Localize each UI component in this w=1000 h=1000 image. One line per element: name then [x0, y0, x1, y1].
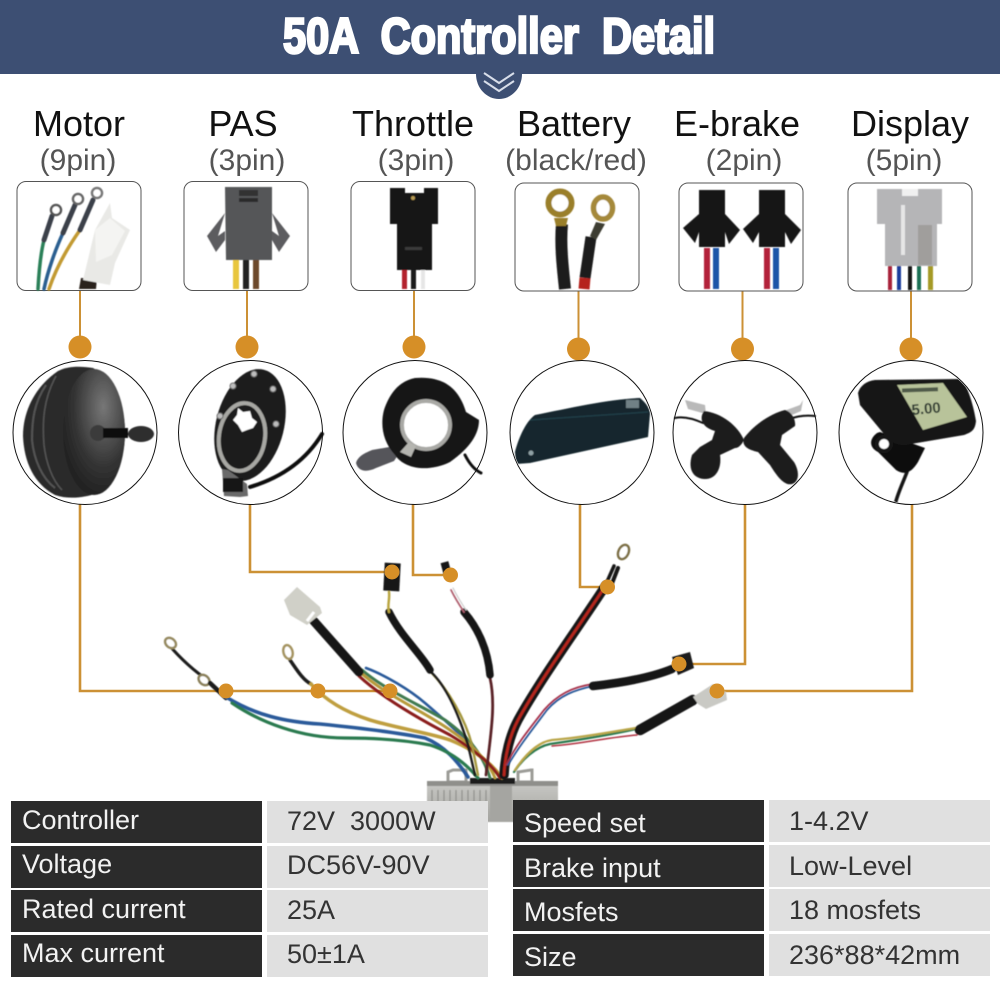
row: controller	[11, 801, 488, 843]
row: voltage: Voltage	[22, 849, 112, 879]
wires: throttle	[441, 561, 493, 775]
header banner	[0, 0, 1000, 99]
row: rated current: Rated current	[22, 894, 186, 924]
heading: PAS: (3pin)	[209, 144, 285, 177]
heading: battery	[505, 103, 647, 177]
connector photo: motor	[17, 182, 141, 290]
heading: e-brake: (2pin)	[706, 144, 782, 177]
heading: throttle: Throttle	[352, 103, 474, 144]
heading: PAS: PAS	[208, 103, 278, 144]
connector photo: PAS	[184, 182, 308, 290]
heading: motor: (9pin)	[40, 144, 116, 177]
row: voltage	[11, 846, 488, 888]
row: max current: 50±1A	[287, 939, 365, 969]
heading: e-brake	[674, 103, 800, 177]
row: brake input: Low-Level	[789, 851, 912, 881]
spec table: right	[513, 800, 990, 976]
title: 50A Controller Detail	[283, 8, 715, 64]
row: max current	[11, 935, 488, 977]
connector headings	[33, 103, 969, 177]
connector photo: throttle	[351, 182, 475, 290]
wires: battery	[504, 543, 631, 775]
row: size: Size	[524, 942, 577, 972]
heading: battery: (black/red)	[505, 144, 647, 177]
heading: battery: Battery	[517, 103, 631, 144]
component circle: e-brake levers	[673, 360, 817, 504]
connector leader lines	[80, 290, 912, 691]
heading: e-brake: E-brake	[674, 103, 800, 144]
controller body	[427, 770, 558, 822]
row: size: 236*88*42mm	[789, 940, 960, 970]
row: mosfets: 18 mosfets	[789, 895, 921, 925]
row: rated current	[11, 890, 488, 932]
row: max current: Max current	[22, 938, 165, 968]
component circle: battery	[510, 360, 654, 504]
component circle: LCD display	[839, 360, 983, 505]
row: rated current: 25A	[287, 895, 335, 925]
heading: display: Display	[851, 103, 969, 144]
wires: PAS	[383, 563, 478, 775]
row: mosfets: Mosfets	[524, 897, 619, 927]
chevron tab	[476, 73, 522, 99]
wires: display	[514, 684, 727, 772]
row: controller: 72V 3000W	[287, 806, 436, 836]
row: size	[513, 934, 990, 976]
component circle: thumb throttle	[343, 360, 487, 504]
wires: hall sensor bundle	[284, 587, 500, 778]
heading: PAS	[208, 103, 285, 177]
controller with wiring harness	[163, 543, 727, 822]
row: speed set: Speed set	[524, 808, 646, 838]
spec table: left	[11, 801, 488, 977]
heading: motor	[33, 103, 125, 177]
row: mosfets	[513, 889, 990, 931]
heading: display: (5pin)	[866, 144, 942, 177]
row: brake input: Brake input	[524, 853, 661, 883]
row: speed set: 1-4.2V	[789, 806, 869, 836]
row: brake input	[513, 845, 990, 887]
heading: throttle	[352, 103, 474, 177]
heading: motor: Motor	[33, 103, 125, 144]
heading: throttle: (3pin)	[378, 144, 454, 177]
connector photo: battery	[515, 183, 639, 291]
connector photo: display	[848, 183, 972, 291]
row: voltage: DC56V-90V	[287, 850, 430, 880]
connector nodes	[68, 336, 922, 360]
component circle: PAS sensor disc	[178, 360, 322, 504]
row: controller: Controller	[22, 805, 139, 835]
wires: motor phase	[163, 636, 502, 778]
heading: display	[851, 103, 969, 177]
harness connection nodes	[218, 564, 724, 698]
wires: e-brake	[506, 652, 694, 765]
row: speed set	[513, 800, 990, 842]
component circle: hub motor	[13, 360, 157, 504]
connector photo: e-brake	[679, 183, 803, 291]
component circle: LCD display: 5.00	[911, 400, 941, 419]
